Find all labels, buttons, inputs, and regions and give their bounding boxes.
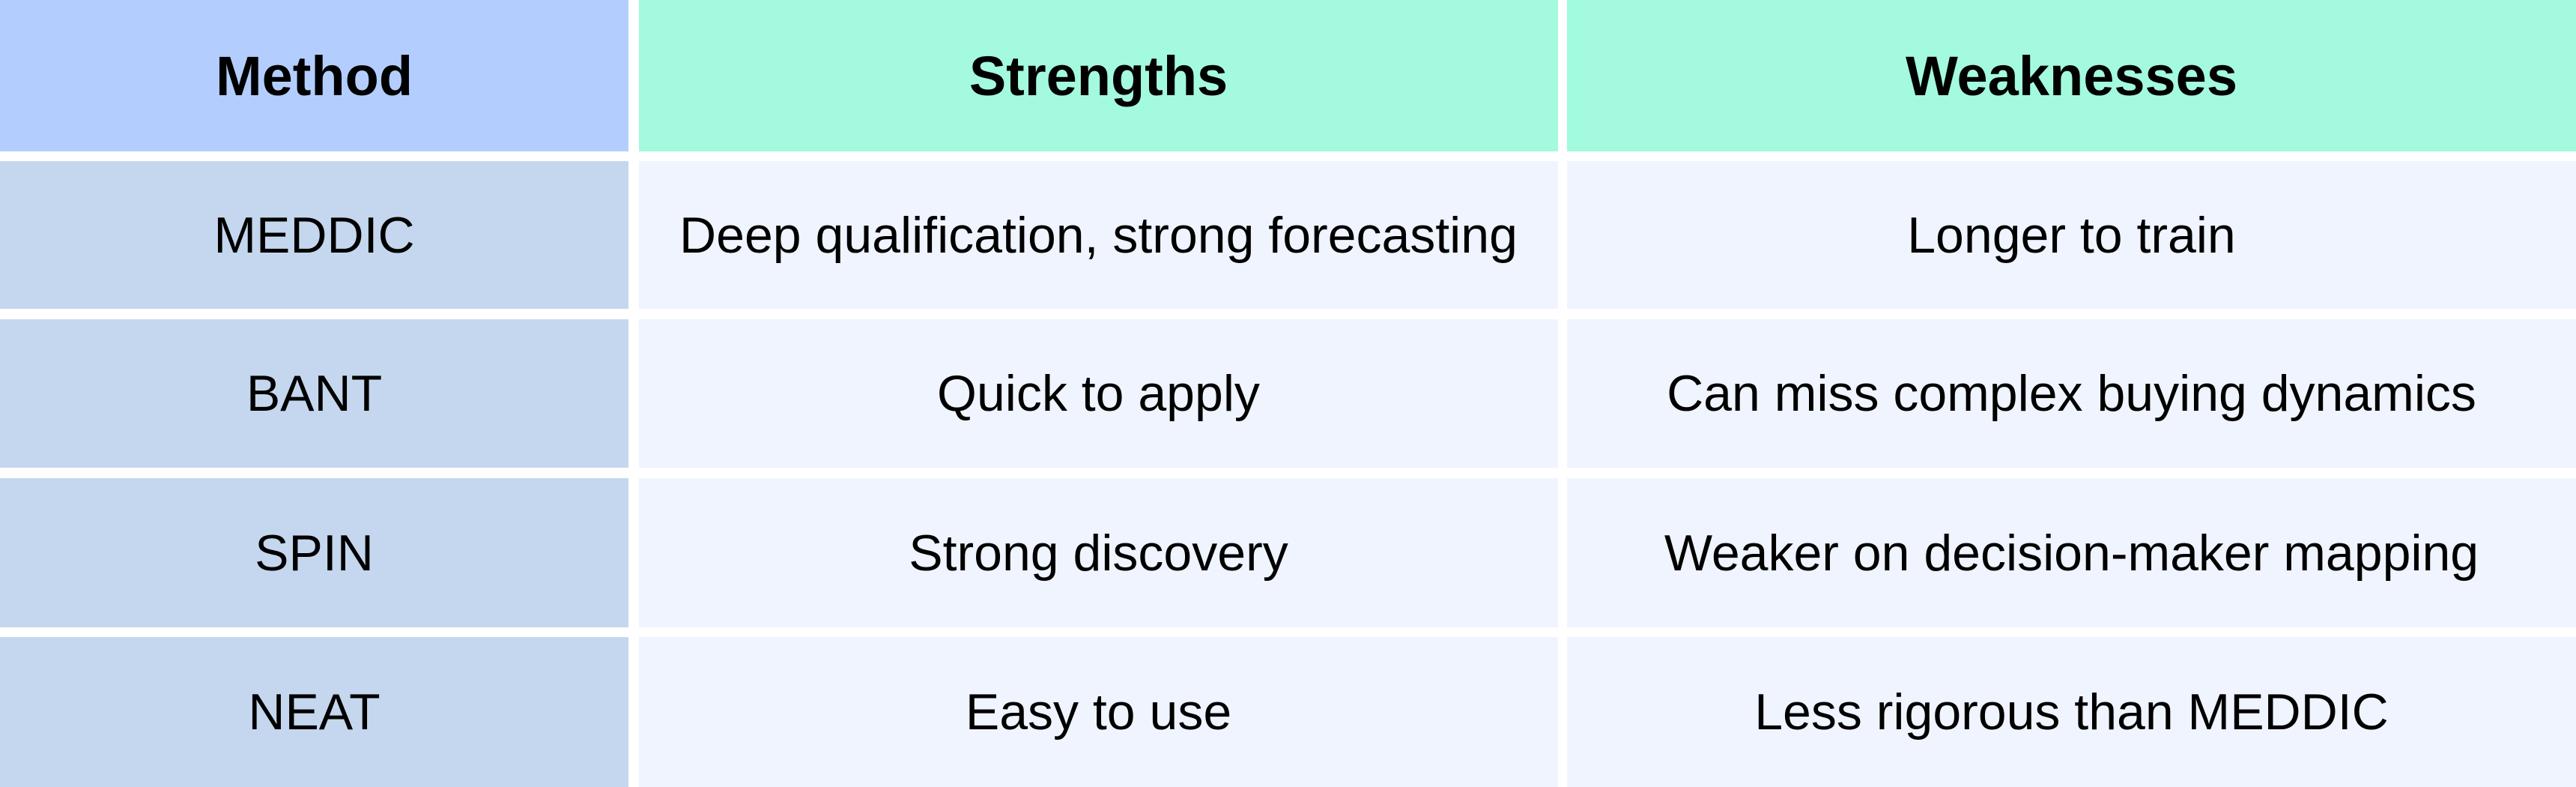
row: BANT weaknesses bbox=[1567, 319, 2576, 468]
row: MEDDIC strengths bbox=[639, 161, 1558, 309]
row: NEAT strengths bbox=[639, 637, 1558, 787]
row: NEAT weaknesses bbox=[1567, 637, 2576, 787]
row: MEDDIC strengths: Deep qualification, strong forecasting bbox=[679, 207, 1518, 264]
header: Strengths bbox=[639, 0, 1558, 151]
row: SPIN method bbox=[0, 478, 628, 627]
row: MEDDIC method: MEDDIC bbox=[213, 207, 415, 264]
row: BANT method bbox=[0, 319, 628, 468]
header: Method: Method bbox=[216, 45, 413, 106]
header: Method bbox=[0, 0, 628, 151]
row: NEAT method bbox=[0, 637, 628, 787]
row: MEDDIC weaknesses bbox=[1567, 161, 2576, 309]
row: NEAT weaknesses: Less rigorous than MEDDIC bbox=[1754, 684, 2389, 741]
row: SPIN weaknesses bbox=[1567, 478, 2576, 627]
row: MEDDIC method bbox=[0, 161, 628, 309]
header: Strengths: Strengths bbox=[969, 45, 1228, 106]
row: MEDDIC weaknesses: Longer to train bbox=[1907, 207, 2236, 264]
row: SPIN strengths bbox=[639, 478, 1558, 627]
row: SPIN method: SPIN bbox=[255, 525, 374, 582]
row: BANT weaknesses: Can miss complex buying dynamics bbox=[1667, 365, 2476, 422]
row: BANT strengths: Quick to apply bbox=[937, 365, 1260, 422]
row: BANT strengths bbox=[639, 319, 1558, 468]
row: SPIN strengths: Strong discovery bbox=[909, 525, 1288, 582]
row: SPIN weaknesses: Weaker on decision-maker mapping bbox=[1664, 525, 2479, 582]
header: Weaknesses bbox=[1567, 0, 2576, 151]
row: BANT method: BANT bbox=[246, 365, 382, 422]
row: NEAT method: NEAT bbox=[248, 684, 381, 741]
row: NEAT strengths: Easy to use bbox=[966, 684, 1231, 741]
header: Weaknesses: Weaknesses bbox=[1906, 45, 2237, 106]
